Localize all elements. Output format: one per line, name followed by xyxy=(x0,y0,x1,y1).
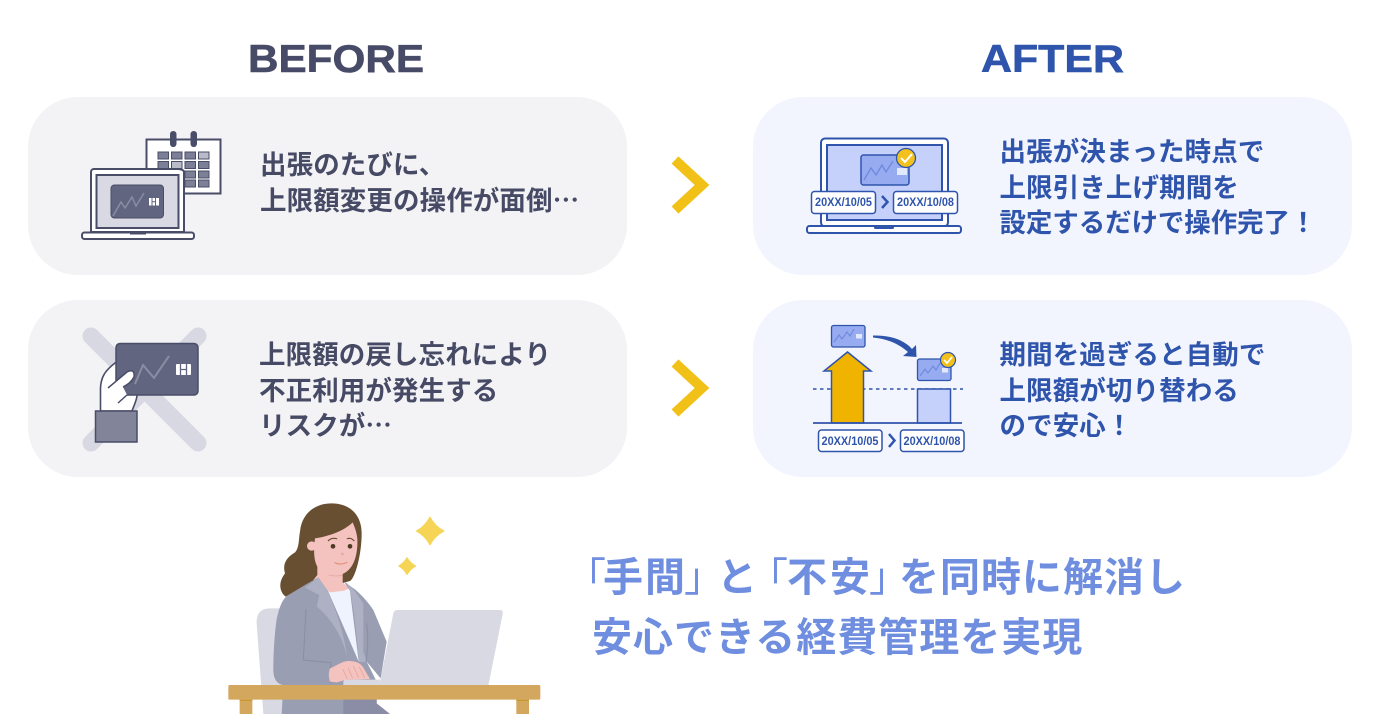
neck and face xyxy=(313,522,357,595)
closing message: 不安 xyxy=(787,556,870,600)
icon: limit chart: 20XX/10/08 xyxy=(904,434,961,448)
text block: 上限額が切り替わる xyxy=(1000,376,1239,406)
closing message: 安心できる経費管理を実現 xyxy=(592,616,1083,660)
jacket xyxy=(273,577,377,714)
text block: 上限額の戻し忘れにより xyxy=(259,340,551,370)
desk xyxy=(228,685,540,700)
closing message: と xyxy=(717,556,757,600)
chair xyxy=(257,608,285,714)
arrow: bottom xyxy=(675,363,702,413)
panel: after 2 xyxy=(753,300,1352,477)
eyes, brows and mouth xyxy=(328,538,354,564)
text block: リスクが… xyxy=(259,404,392,443)
closing message: 「 xyxy=(566,556,606,600)
text block: 上限額変更の操作が面倒… xyxy=(260,179,579,218)
icon: laptop with dates: 20XX/10/08 xyxy=(897,195,954,209)
icon: hand holding card over cross xyxy=(91,336,198,443)
closing message: 手間 xyxy=(603,556,685,600)
text block: 期間を過ぎると自動で xyxy=(1000,340,1266,370)
text block: 出張のたびに、 xyxy=(260,150,445,180)
icon: limit chart: 20XX/10/05 xyxy=(822,434,879,448)
heading: AFTER: AFTER xyxy=(981,38,1124,81)
icon: laptop with dates xyxy=(807,138,961,233)
laptop xyxy=(379,610,503,686)
text block: 出張が決まった時点で xyxy=(1000,137,1264,167)
panel: before 1 xyxy=(28,97,627,275)
arrow: top xyxy=(675,160,702,210)
icon: calendar and laptop xyxy=(82,131,220,239)
sparkles xyxy=(417,517,444,545)
panel: after 1 xyxy=(753,97,1352,275)
closing message: 「 xyxy=(748,556,788,600)
icon: limit chart xyxy=(813,326,964,452)
jacket sleeve xyxy=(344,582,387,678)
text block: 上限引き上げ期間を xyxy=(1000,173,1239,203)
closing message: 」 xyxy=(869,556,909,600)
icon: laptop with dates: 20XX/10/05 xyxy=(815,195,872,209)
panel: before 2 xyxy=(28,300,627,477)
lapels xyxy=(305,577,347,658)
illustration: woman at laptop xyxy=(228,503,540,714)
closing message: を同時に解消し xyxy=(899,556,1185,600)
closing message: 」 xyxy=(684,556,724,600)
text block: 不正利用が発生する xyxy=(259,376,498,406)
text block: ので安心！ xyxy=(1000,411,1132,441)
text block: 設定するだけで操作完了！ xyxy=(1000,208,1316,238)
heading: BEFORE: BEFORE xyxy=(248,38,424,81)
hair xyxy=(280,503,362,597)
shirt xyxy=(328,590,359,663)
ear xyxy=(307,541,316,551)
hand xyxy=(329,661,370,682)
lower body xyxy=(343,699,390,714)
